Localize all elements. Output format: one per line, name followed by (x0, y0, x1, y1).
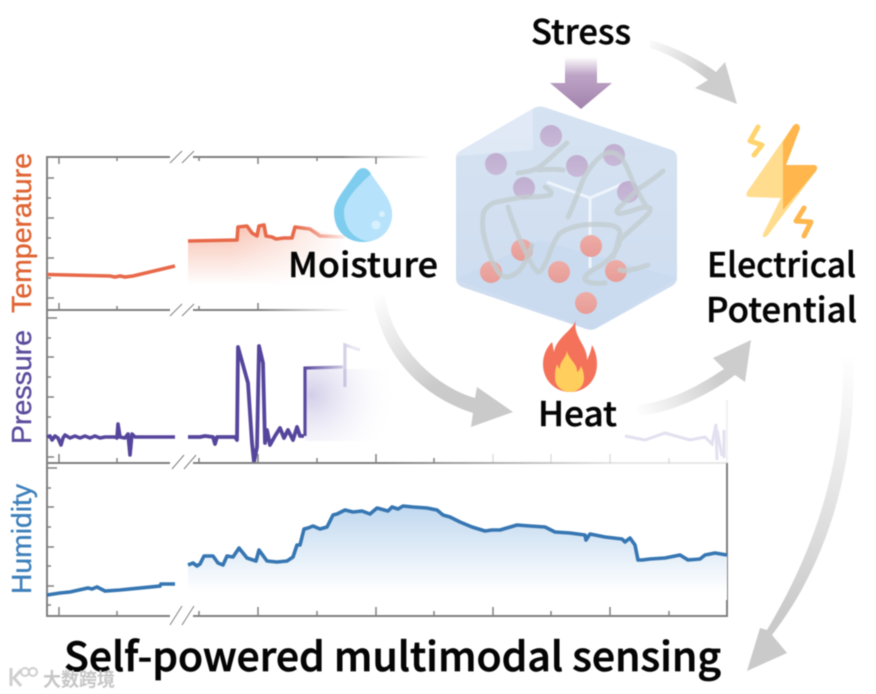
humidity curve left (47, 584, 175, 595)
temperature fill fade (230, 224, 350, 288)
pressure fill (305, 369, 410, 441)
pressure curve fading step (305, 345, 360, 436)
pressure curve left (47, 424, 175, 455)
chart 3 axes (47, 400, 727, 625)
icon: water drop (334, 168, 392, 242)
arrow: moisture to heat (373, 295, 513, 427)
panel: temperature chart (6, 151, 430, 316)
arrow: heat to electrical potential (637, 340, 751, 417)
temperature fill (188, 226, 345, 285)
cube inner edges (547, 182, 627, 268)
temperature curve right (188, 225, 345, 241)
chart 2 axes (47, 310, 669, 469)
heading: Stress: Stress (531, 5, 631, 54)
icon: lightning bolt (746, 124, 817, 237)
arrow: stress to electrical potential (650, 40, 737, 104)
icon: stress arrow (550, 57, 612, 109)
bolt main (746, 124, 817, 237)
bolt shaded half (783, 124, 817, 210)
watermark (11, 668, 115, 691)
purple particles (485, 125, 639, 203)
panel: pressure chart (6, 310, 724, 469)
chart 1 axes (47, 151, 430, 316)
icon: gel cube (456, 106, 677, 330)
heading: Electrical Potential (706, 238, 857, 332)
panel: humidity chart (6, 400, 727, 625)
heading: Heat: Heat (538, 387, 617, 436)
watermark: 大数跨境 (43, 668, 115, 691)
heading: Electrical Potential: Electrical (707, 238, 856, 287)
cube body (456, 106, 677, 330)
heading: Moisture: Moisture (288, 238, 438, 287)
pressure axis label: Pressure (6, 330, 37, 444)
pressure curve faint tail (625, 424, 724, 460)
heading: Electrical Potential: Potential (706, 283, 857, 332)
humidity axis label: Humidity (6, 484, 37, 594)
humidity curve right (188, 506, 727, 566)
temperature curve left (47, 266, 175, 277)
humidity fill (188, 506, 727, 600)
polymer strands (483, 143, 663, 283)
temperature axis label: Temperature (6, 153, 37, 313)
pressure curve right (188, 346, 304, 462)
arrow: electrical potential to sensing (747, 357, 853, 671)
small sparks (750, 127, 762, 155)
red particles (480, 235, 627, 314)
icon: flame (543, 320, 597, 392)
title: Self-powered multimodal sensing (64, 625, 721, 683)
